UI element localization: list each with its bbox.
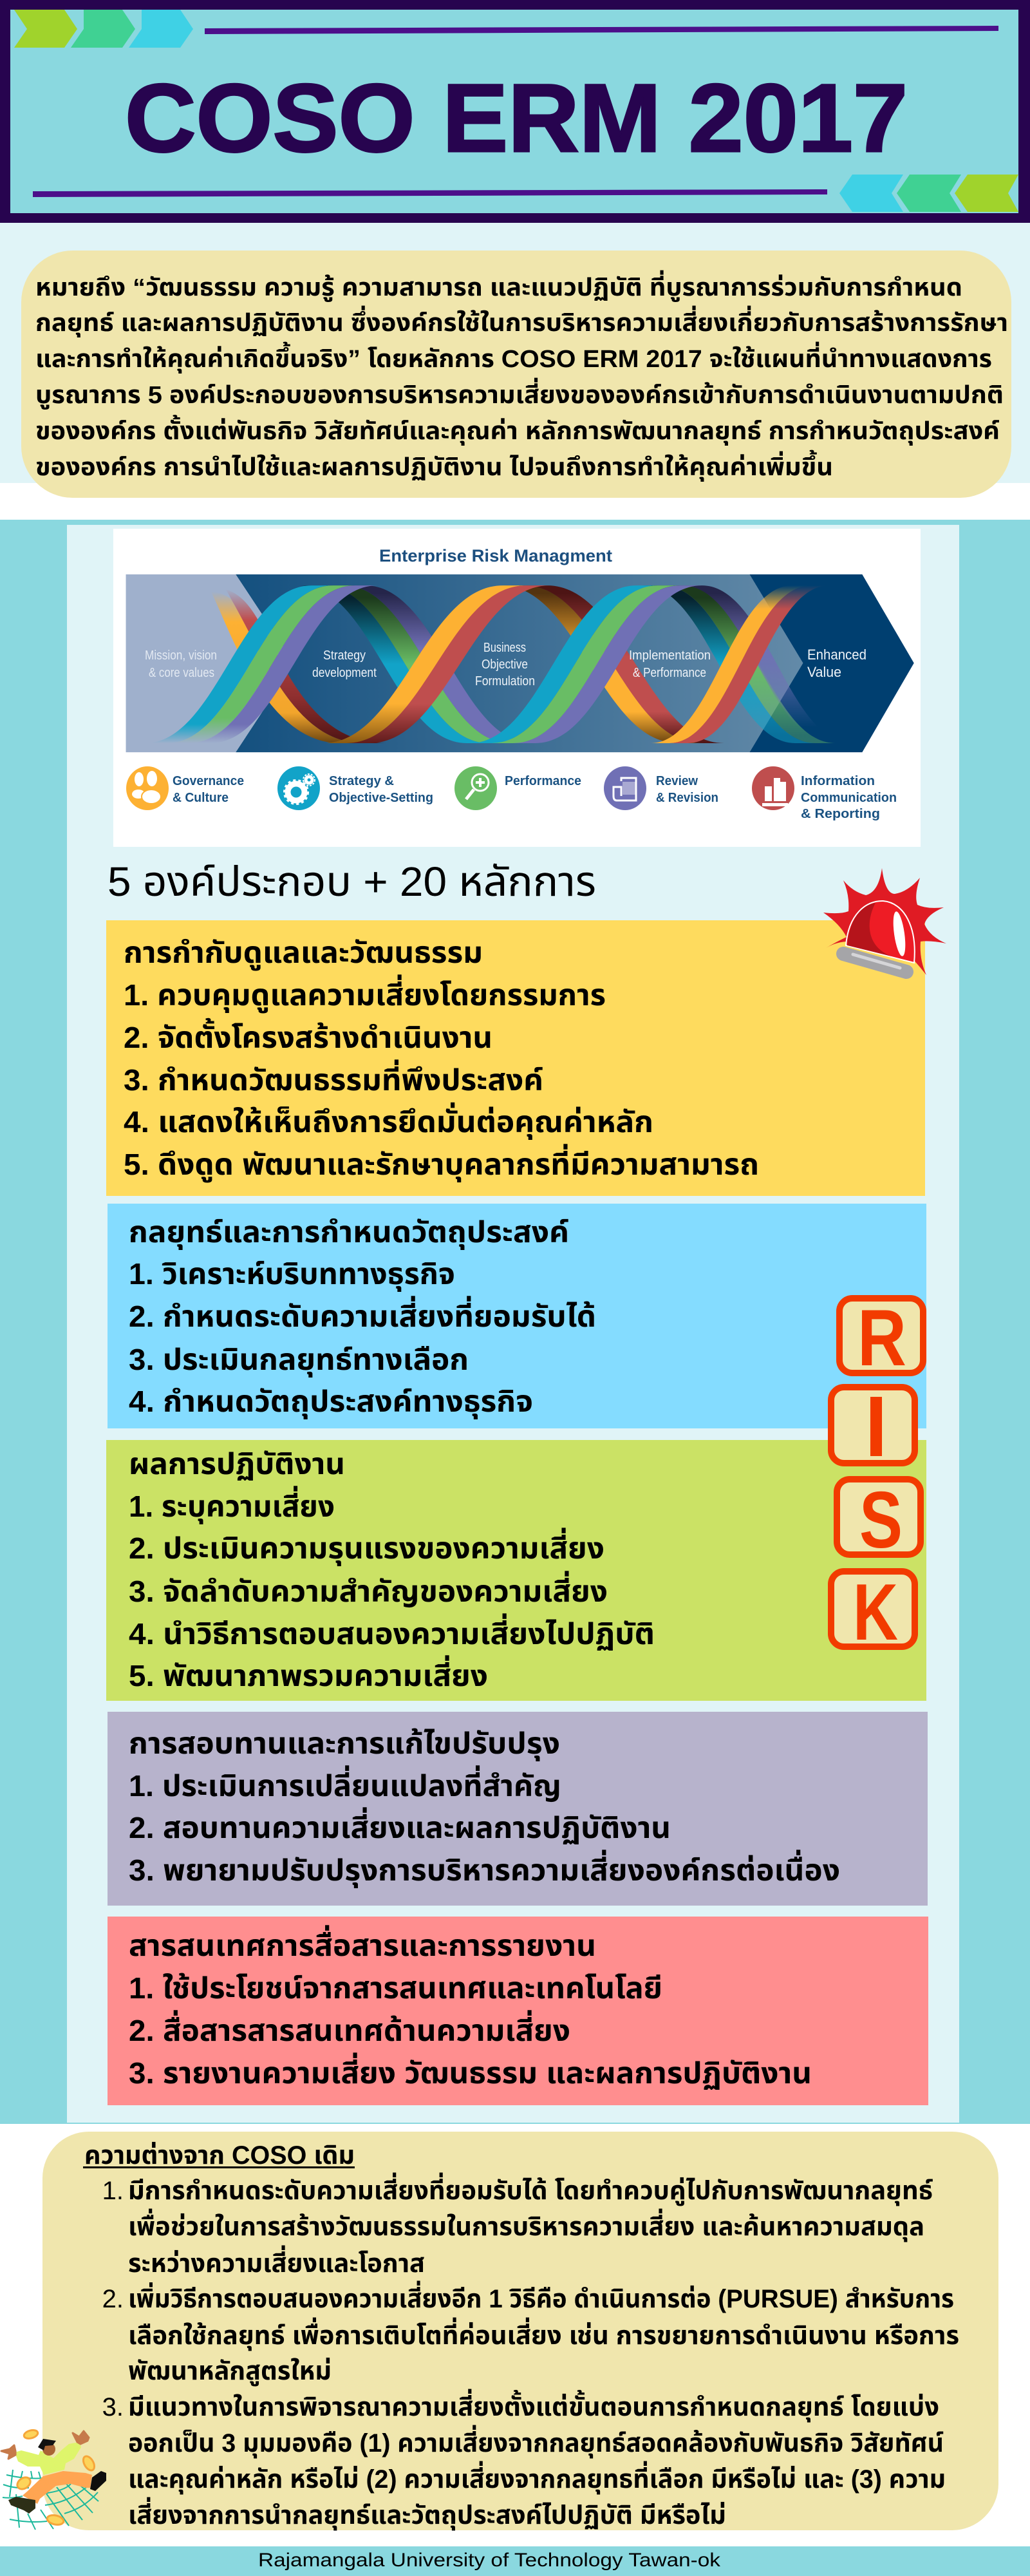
legend: information, communication and reporting: & Reporting [801,807,880,821]
block: S: S [859,1476,903,1565]
ERM diagram image [113,529,921,847]
footer: Rajamangala University of Technology Tawan-ok [258,2550,721,2571]
legend: governance and culture [126,766,244,810]
diagram title: Enterprise Risk Managment [379,546,612,565]
legend: information, communication and reporting [752,766,897,821]
stage labels: Formulation [475,674,535,688]
panel: review and revision: 2. สอบทานความเสี่ยงและผลการปฏิบัติงาน [129,1807,671,1844]
block: I: I [870,1385,882,1473]
item 2 [102,2280,959,2387]
item 2: เลือกใช้กลยุทธ์ เพื่อการเติบโตที่ค่อนเสี่ยง เช่น การขยายการดำเนินงาน หรือการ [128,2317,959,2351]
legend: review and revision: & Revision [656,791,718,805]
definition text: หมายถึง “วัฒนธรรม ความรู้ ความสามารถ และแนวปฏิบัติ ที่บูรณาการร่วมกับการกำหนด [35,270,962,302]
chevrons: top left [14,10,193,48]
stage labels: Enhanced [807,647,866,663]
legend: strategy and objective-setting [277,766,433,810]
panel: review and revision [108,1712,928,1906]
panel: information, communication and reporting: 2. สื่อสารสารสนเทศด้านความเสี่ยง [129,2010,570,2047]
arrow with ribbons [126,574,914,752]
hands [1,2431,89,2459]
stage labels: development [312,666,377,680]
definition text [35,270,1008,482]
pants [23,2471,92,2504]
panel: information, communication and reporting: 3. รายงานความเสี่ยง วัฒนธรรม และผลการปฏิบัติงาน [129,2052,812,2090]
legend: governance and culture: Governance [173,774,244,788]
legend: strategy and objective-setting: Strategy & [329,774,394,788]
item 2: 2. [102,2285,124,2313]
definition text: ขององค์กร การนำไปใช้และผลการปฏิบัติงาน ไปจนถึงการทำให้คุณค่าเพิ่มขึ้น [35,450,833,482]
item 3 [102,2389,946,2531]
head and hair [38,2439,56,2456]
definition text: และการทำให้คุณค่าเกิดขึ้นจริง” โดยหลักการ COSO ERM 2017 จะใช้แผนที่นำทางแสดงการ [35,341,992,374]
legend: review and revision [604,766,718,810]
block: K: K [853,1568,898,1657]
block: I [831,1385,915,1473]
item 1 [102,2172,933,2278]
panel: review and revision: การสอบทานและการแก้ไขปรับปรุง [129,1727,560,1761]
item 1: เพื่อช่วยในการสร้างวัฒนธรรมในการบริหารความเสี่ยง และค้นหาความสมดุล [128,2208,924,2242]
RISK letter blocks [831,1294,923,1657]
definition section [0,223,1030,498]
legend: performance [454,766,581,810]
definition text: ขององค์กร ตั้งแต่พันธกิจ วิสัยทัศน์และคุณค่า หลักการพัฒนากลยุทธ์ การกำหนวัตถุประสงค์ [35,414,1000,446]
coins [15,2429,97,2526]
block: R [839,1294,923,1383]
chevrons: bottom right [839,175,1018,212]
panel: strategy and objective-setting: กลยุทธ์และการกำหนดวัตถุประสงค์ [129,1215,569,1250]
block: S [837,1476,921,1565]
stage labels [145,641,866,688]
item 2: พัฒนาหลักสูตรใหม่ [128,2356,332,2387]
panel: governance and culture: การกำกับดูแลและวัฒนธรรม [124,936,483,971]
legend: information, communication and reporting: Communication [801,791,897,805]
panel: information, communication and reporting [108,1917,928,2105]
panel: governance and culture: 4. แสดงให้เห็นถึงการยึดมั่นต่อคุณค่าหลัก [124,1103,653,1140]
panel: governance and culture: 2. จัดตั้งโครงสร้างดำเนินงาน [124,1018,492,1054]
panel: performance: 5. พัฒนาภาพรวมความเสี่ยง [129,1655,488,1692]
legend: governance and culture: & Culture [173,791,229,805]
panel: performance: 1. ระบุความเสี่ยง [129,1486,335,1524]
definition text: บูรณาการ 5 องค์ประกอบของการบริหารความเสี่ยงขององค์กรเข้ากับการดำเนินงานตามปกติ [35,377,1004,410]
panel: review and revision: 3. พยายามปรับปรุงการบริหารความเสี่ยงองค์กรต่อเนื่อง [129,1850,840,1888]
stage labels: Business [483,641,526,655]
header banner [0,0,1030,223]
panel: strategy and objective-setting: 2. กำหนดระดับความเสี่ยงที่ยอมรับได้ [129,1296,596,1333]
stage labels: Objective [482,658,528,672]
panel: performance: 2. ประเมินความรุนแรงของความเสี่ยง [129,1528,604,1566]
panel: governance and culture [106,920,925,1196]
item 3: ออกเป็น 3 มุมมองคือ (1) ความเสี่ยงจากกลยุทธ์สอดคล้องกับพันธกิจ วิสัยทัศน์ [128,2425,944,2459]
item 3: เสี่ยงจากการนำกลยุทธ์และวัตถุประสงค์ไปปฏิบัติ มีหรือไม่ [128,2497,726,2531]
item 3: และคุณค่าหลัก หรือไม่ (2) ความเสี่ยงจากกลยุทธที่เลือก มีหรือไม่ และ (3) ความ [128,2461,946,2495]
block: R: R [857,1294,906,1383]
shirt [15,2442,81,2475]
panel: performance [106,1440,926,1701]
item 3: มีแนวทางในการพิจารณาความเสี่ยงตั้งแต่ขั้นตอนการกำหนดกลยุทธ์ โดยแบ่ง [128,2389,939,2423]
panel: governance and culture: 5. ดึงดูด พัฒนาและรักษาบุคลากรที่มีความสามารถ [124,1144,759,1182]
panel: differences from original COSO [42,2132,998,2531]
stage labels: Mission, vision [145,649,217,663]
item 3: 3. [102,2393,124,2421]
net [3,2470,98,2530]
panel: performance: 3. จัดลำดับความสำคัญของความเสี่ยง [129,1571,608,1608]
stage labels: Implementation [629,649,711,663]
differences heading: ความต่างจาก COSO เดิม [84,2141,355,2170]
panel: information, communication and reporting: สารสนเทศการสื่อสารและการรายงาน [129,1925,596,1962]
panel: strategy and objective-setting: 4. กำหนดวัตถุประสงค์ทางธุรกิจ [129,1385,533,1419]
heading: 5 components + 20 principles: 5 องค์ประกอบ + 20 หลักการ [108,858,596,905]
panel: strategy and objective-setting [108,1204,926,1428]
main section background [0,520,1030,2124]
stage labels: & core values [149,666,214,680]
legend: strategy and objective-setting: Objective-Setting [329,791,433,805]
panel: performance: ผลการปฏิบัติงาน [129,1447,345,1481]
legend: information, communication and reporting: Information [801,774,875,788]
panel: review and revision: 1. ประเมินการเปลี่ยนแปลงที่สำคัญ [129,1765,561,1803]
item 1: ระหว่างความเสี่ยงและโอกาส [128,2245,425,2278]
panel: strategy and objective-setting: 1. วิเคราะห์บริบททางธุรกิจ [129,1257,455,1292]
panel: governance and culture: 1. ควบคุมดูแลความเสี่ยงโดยกรรมการ [124,974,606,1013]
panel: performance: 4. นำวิธีการตอบสนองความเสี่ยงไปปฏิบัติ [129,1613,655,1651]
panel: information, communication and reporting: 1. ใช้ประโยชน์จากสารสนเทศและเทคโนโลยี [129,1971,662,2005]
stage labels: & Performance [633,666,706,680]
definition text: กลยุทธ์ และผลการปฏิบัติงาน ซึ่งองค์กรใช้ในการบริหารความเสี่ยงเกี่ยวกับการสร้างการรักษา [35,305,1008,337]
stage labels: Value [807,664,841,680]
panel: strategy and objective-setting: 3. ประเมินกลยุทธ์ทางเลือก [129,1343,469,1378]
icon: red alarm siren [823,868,946,975]
panel: governance and culture: 3. กำหนดวัฒนธรรมที่พึงประสงค์ [124,1059,543,1097]
item 1: 1. [102,2177,124,2205]
stage labels: Strategy [323,649,366,663]
legend: performance: Performance [505,774,581,788]
illustration: person falling into safety net with coins [1,2429,106,2530]
footer [0,2546,1030,2576]
item 2: เพิ่มวิธีการตอบสนองความเสี่ยงอีก 1 วิธีคือ ดำเนินการต่อ (PURSUE) สำหรับการ [128,2280,954,2313]
item 1: มีการกำหนดระดับความเสี่ยงที่ยอมรับได้ โดยทำควบคู่ไปกับการพัฒนากลยุทธ์ [128,2172,933,2206]
block: K [831,1568,915,1657]
shoes [8,2471,106,2514]
legend: review and revision: Review [656,774,698,788]
title: COSO ERM 2017 [125,64,908,172]
